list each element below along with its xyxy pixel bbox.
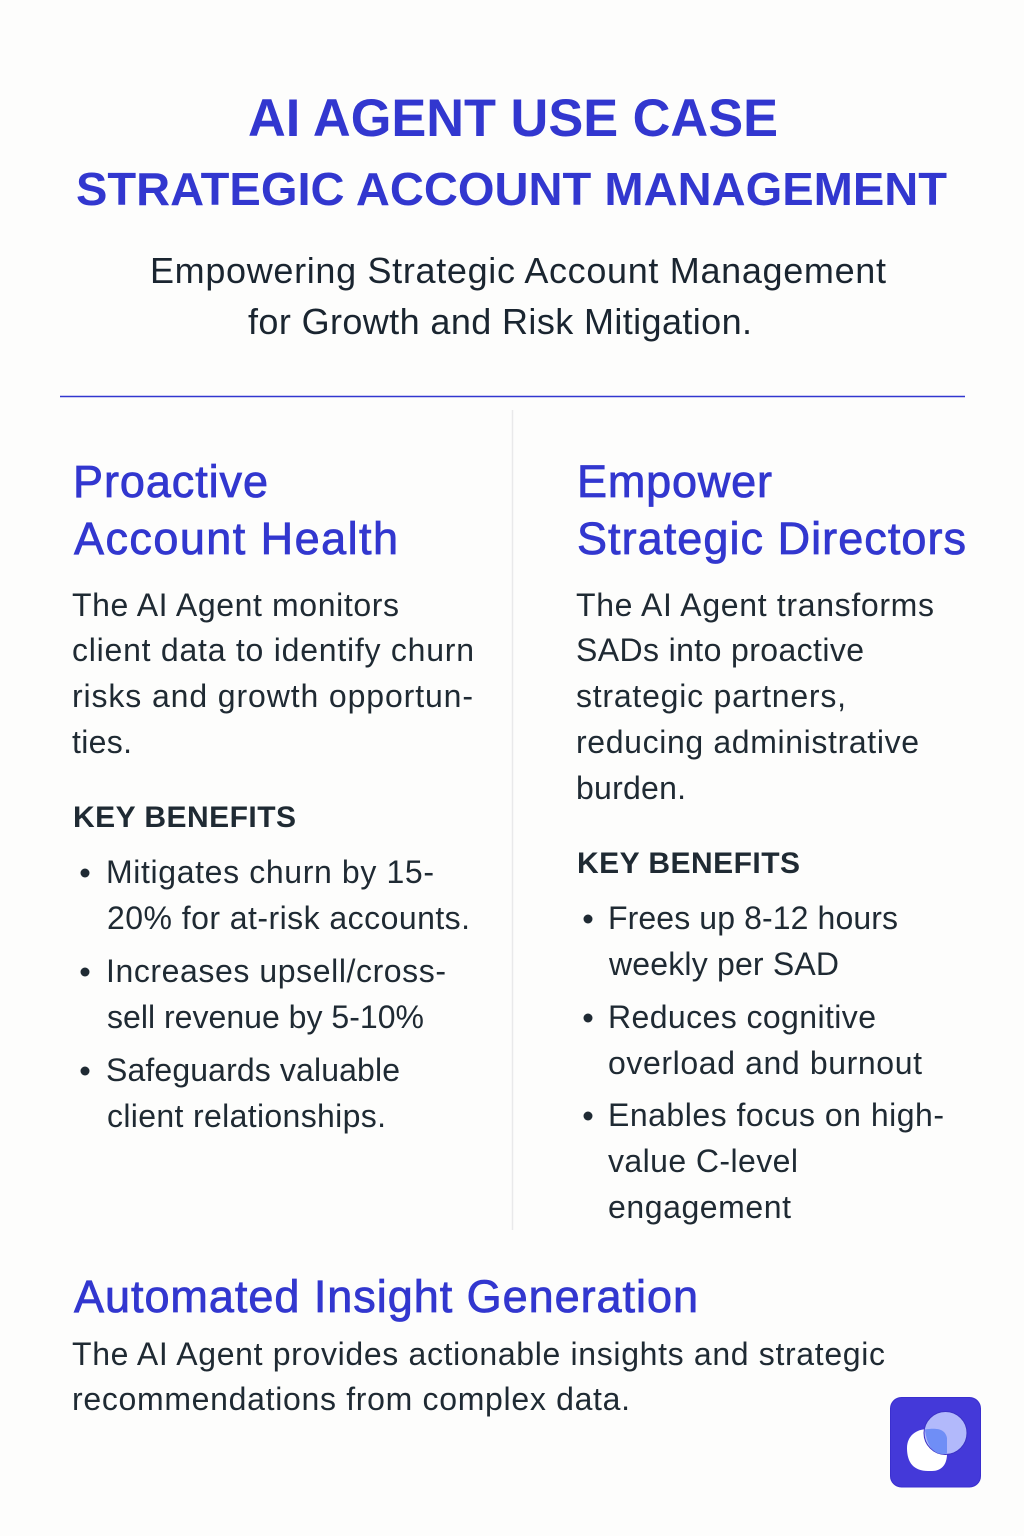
heading: key benefits left: KEY BENEFITS (73, 801, 296, 834)
text block: directors description: burden. (576, 770, 686, 806)
list: left benefits: 20% for at-risk accounts. (107, 900, 470, 936)
list: right benefits: value C-level (608, 1143, 798, 1179)
list: right benefits: engagement (608, 1189, 791, 1225)
list: right benefits: Reduces cognitive (608, 999, 876, 1035)
text block: account health description: client data to identify churn (72, 632, 474, 668)
list: left benefits: sell revenue by 5-10% (107, 999, 424, 1035)
icon: overlapping shapes logo (890, 1398, 980, 1487)
list: left benefits (80, 854, 470, 1134)
text block: insight description: The AI Agent provides actionable insights and strategic (72, 1336, 885, 1372)
text block: directors description: SADs into proactive (576, 632, 864, 668)
list: right benefits: Enables focus on high- (608, 1097, 944, 1133)
panel: empower strategic directors (576, 456, 966, 1225)
title: AI AGENT USE CASE (248, 89, 778, 148)
text block: insight description (72, 1336, 885, 1417)
heading: empower strategic directors: Strategic Directors (577, 513, 966, 564)
text block: account health description: ties. (72, 724, 132, 760)
heading: automated insight generation: Automated Insight Generation (74, 1271, 698, 1322)
list: left benefits: Safeguards valuable (106, 1052, 400, 1088)
heading: proactive account health: Proactive (73, 456, 268, 507)
list: right benefits (584, 900, 944, 1225)
panel: proactive account health (72, 456, 474, 1134)
text block: account health description (72, 587, 474, 760)
text block: directors description: The AI Agent transforms (576, 587, 934, 623)
list: left benefits: client relationships. (107, 1098, 386, 1134)
heading: key benefits right: KEY BENEFITS (577, 847, 800, 880)
subtitle: for Growth and Risk Mitigation. (248, 301, 752, 342)
panel: automated insight generation (72, 1271, 885, 1417)
heading: empower strategic directors (577, 456, 966, 564)
heading: proactive account health: Account Health (74, 513, 398, 564)
text block: directors description: reducing administrative (576, 724, 919, 760)
title: STRATEGIC ACCOUNT MANAGEMENT (76, 163, 947, 215)
list: left benefits: Increases upsell/cross- (106, 953, 446, 989)
list: right benefits: Frees up 8-12 hours (608, 900, 898, 936)
title (76, 89, 947, 215)
list: right benefits: weekly per SAD (608, 946, 839, 982)
text block: insight description: recommendations from complex data. (72, 1381, 630, 1417)
list: right benefits: overload and burnout (608, 1045, 922, 1081)
text block: account health description: risks and growth opportun- (72, 678, 473, 714)
text block: directors description (576, 587, 934, 806)
text block: directors description: strategic partners, (576, 678, 846, 714)
heading: proactive account health (73, 456, 398, 564)
text block: account health description: The AI Agent monitors (72, 587, 399, 623)
subtitle (150, 250, 886, 342)
list: left benefits: Mitigates churn by 15- (106, 854, 434, 890)
heading: empower strategic directors: Empower (577, 456, 772, 507)
subtitle: Empowering Strategic Account Management (150, 250, 886, 291)
